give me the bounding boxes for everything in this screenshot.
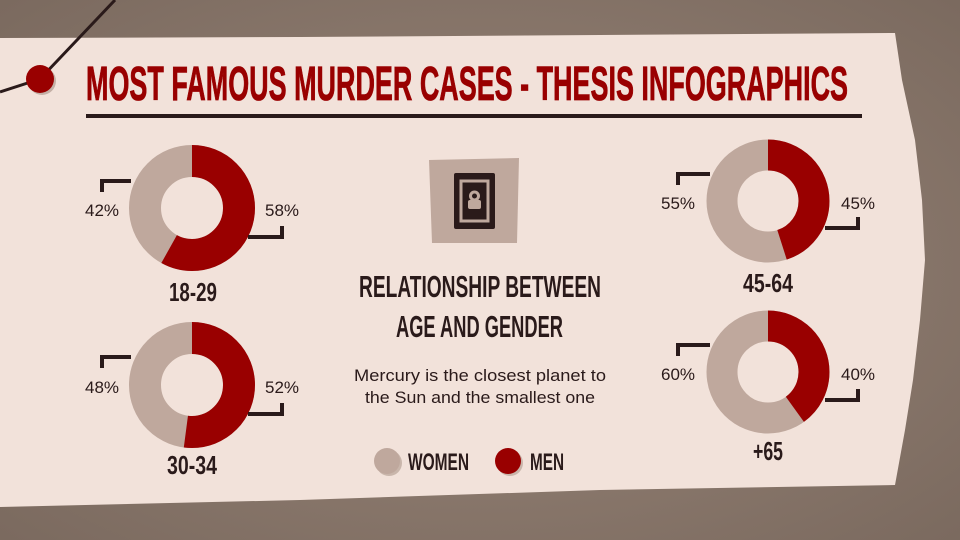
body text: Mercury is the closest planet to	[354, 366, 606, 385]
chart 45-64: 55%	[661, 194, 695, 213]
chart 18-29: 18-29	[169, 277, 217, 307]
chart 45-64	[661, 155, 875, 298]
heading: AGE AND GENDER	[396, 309, 563, 344]
chart +65: 60%	[661, 365, 695, 384]
body text: the Sun and the smallest one	[365, 388, 595, 407]
chart +65	[661, 326, 875, 466]
chart 30-34: 48%	[85, 378, 119, 397]
legend: WOMEN	[408, 449, 469, 476]
chart 30-34: 30-34	[167, 450, 217, 480]
chart 18-29: 58%	[265, 201, 299, 220]
icon: phone/lock	[429, 158, 519, 243]
chart 30-34: 52%	[265, 378, 299, 397]
string	[0, 0, 115, 92]
heading: RELATIONSHIP BETWEEN	[359, 269, 601, 304]
title underline	[86, 114, 862, 118]
chart 45-64: 45-64	[743, 268, 793, 298]
pin	[28, 67, 56, 95]
chart +65: 40%	[841, 365, 875, 384]
chart 18-29	[85, 161, 299, 307]
heading	[359, 269, 601, 344]
legend	[374, 448, 564, 476]
body text	[354, 366, 606, 407]
legend: MEN	[530, 449, 564, 476]
chart 30-34	[85, 338, 299, 480]
chart 18-29: 42%	[85, 201, 119, 220]
chart +65: +65	[753, 436, 783, 466]
chart 45-64: 45%	[841, 194, 875, 213]
